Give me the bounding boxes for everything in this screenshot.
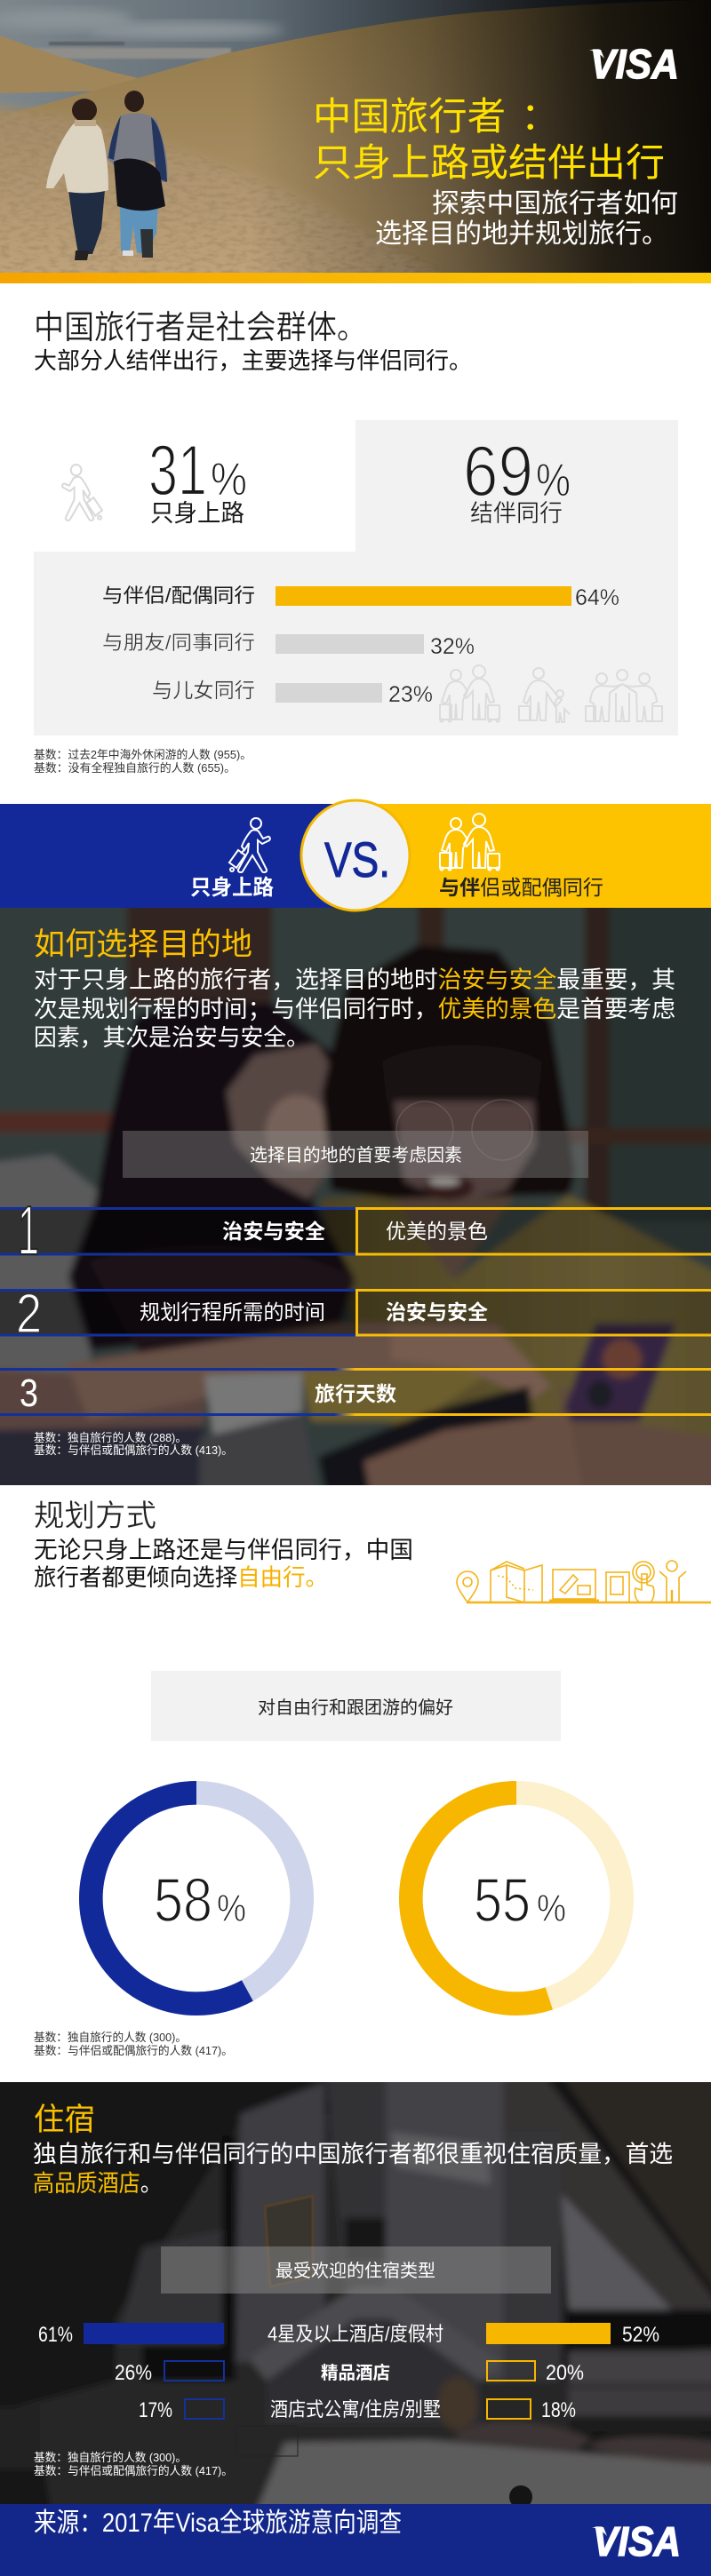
ranking row 1: 优美的景色 [386,1220,488,1243]
heading: 中国旅行者是社会群体。 [34,309,367,346]
visa logo: VISA [593,2518,681,2564]
ranking row 3: 3 [20,1371,38,1415]
donut chart: solo 58%: % [217,1888,246,1930]
donut chart: solo 58% [91,1793,302,2004]
base notes: 基数：独自旅行的人数 (300)。 [34,2451,187,2464]
icon: solo walker white [229,818,270,872]
base notes [34,1431,233,1457]
label: solo: 只身上路 [190,876,274,900]
bar chart: accommodation types: 酒店式公寓/住房/别墅 [270,2398,441,2421]
panel: accommodation [0,2061,711,2523]
paragraph [34,966,675,1051]
bar chart: accommodation types [38,2323,659,2422]
vs circle: VS. [324,831,390,887]
orange band [0,273,711,283]
visa logo: VISA [590,41,679,87]
stat: 69% together: 结伴同行 [470,500,563,527]
panel: how to choose a destination [0,800,711,1510]
icon: group gray [586,670,662,721]
caption box [161,2246,551,2294]
panel: social group intro [34,309,472,374]
hero subtitle: 选择目的地并规划旅行。 [375,219,668,249]
heading: 如何选择目的地 [34,927,252,962]
donut chart: with partner 55%: % [537,1888,566,1930]
bar chart: accommodation types: 精品酒店 [321,2363,390,2383]
panel: planning style [34,1499,711,2057]
background photo: attic bedroom [0,2061,711,2523]
ranking row 3 [0,1368,711,1416]
hero photo: couple walking on dunes [0,0,711,284]
base notes: 基数：与伴侣或配偶旅行的人数 (417)。 [34,2044,233,2057]
ranking row 2: 2 [16,1284,42,1345]
bar chart: accommodation types: 17% [139,2398,172,2422]
bar chart: travel companions: 与朋友/同事同行 [102,632,255,654]
stat: 69% together [463,432,571,527]
stat: 31% alone [148,431,247,527]
bar chart: travel companions: 32% [430,634,475,659]
donut chart: solo 58%: 58 [154,1865,212,1935]
donut chart: with partner 55% [411,1793,622,2004]
label: with partner: 与伴侣或配偶同行 [439,876,603,899]
source line: 来源：2017年Visa全球旅游意向调查 [34,2508,402,2538]
icon: parent and child gray [519,668,570,722]
bar chart: travel companions: 23% [388,682,433,707]
background photo: two women with phones [0,888,711,1510]
base notes: 基数：独自旅行的人数 (288)。 [34,1431,187,1444]
heading: 规划方式 [34,1499,156,1533]
vs circle [301,800,410,910]
paragraph: 因素，其次是治安与安全。 [34,1024,309,1051]
icon strip: travel planning [457,1561,711,1602]
stat: 31% alone: 31 [148,431,207,511]
gold half [356,804,711,908]
paragraph: 次是规划行程的时间；与伴侣同行时，优美的景色是首要考虑 [34,996,675,1022]
bar chart: accommodation types: 26% [115,2361,152,2385]
bar chart: accommodation types: 4星及以上酒店/度假村 [268,2323,443,2345]
stat: 69% together: % [536,455,571,506]
figure: man [107,91,167,258]
paragraph: 高品质酒店。 [33,2170,162,2197]
blue half [0,804,356,908]
panel: solo vs together stats [34,420,678,775]
caption box [123,1131,588,1178]
bar chart: travel companions: 与伴侣/配偶同行 [102,584,255,607]
bar chart: travel companions: 64% [575,585,619,610]
ranking row 1: 1 [18,1191,39,1269]
base notes [34,2451,233,2477]
hero title: 只身上路或结伴出行 [313,142,665,185]
panel: footer [0,2504,711,2576]
icon: solo walker gray [62,465,102,521]
base notes: 基数：没有全程独自旅行的人数 (655)。 [34,761,236,775]
base notes: 基数：独自旅行的人数 (300)。 [34,2031,187,2044]
hero title [313,96,665,185]
panel: hero [0,0,711,284]
figure: woman [46,99,108,260]
ranking row 2: 治安与安全 [386,1300,488,1324]
ranking row 1: 治安与安全 [222,1220,325,1243]
base notes [34,2031,233,2057]
gray stepped background [34,420,678,735]
stat: 31% alone: % [211,454,247,505]
bar chart: travel companions: 与儿女同行 [152,679,255,702]
base notes [34,748,252,775]
ranking row 2: 规划行程所需的时间 [140,1300,325,1324]
ranking row 2 [0,1284,711,1345]
heading: 住宿 [34,2103,95,2137]
ranking row 1 [0,1191,711,1269]
ranking row 3: 旅行天数 [315,1382,396,1405]
hero subtitle [375,189,678,249]
caption box [151,1671,561,1741]
vs band [0,800,711,910]
paragraph [34,1537,413,1591]
hero title: ： [521,96,559,139]
base notes: 基数：与伴侣或配偶旅行的人数 (413)。 [34,1443,233,1457]
paragraph: 旅行者都更倾向选择自由行。 [34,1564,328,1591]
hero title: 中国旅行者 [313,96,506,139]
stat: 31% alone: 只身上路 [150,500,244,527]
stat: 69% together: 69 [463,432,533,512]
donut chart: with partner 55%: 55 [474,1865,531,1935]
caption box: 对自由行和跟团游的偏好 [258,1697,453,1718]
paragraph [33,2141,673,2197]
icon: couple gray [440,665,499,722]
caption box: 选择目的地的首要考虑因素 [250,1145,462,1165]
base notes: 基数：与伴侣或配偶旅行的人数 (417)。 [34,2464,233,2477]
base notes: 基数：过去2年中海外休闲游的人数 (955)。 [34,748,252,761]
hero subtitle: 探索中国旅行者如何 [432,189,678,219]
caption box: 最受欢迎的住宿类型 [276,2261,435,2281]
bar chart: travel companions [102,584,619,707]
paragraph: 独自旅行和与伴侣同行的中国旅行者都很重视住宿质量，首选 [33,2141,673,2167]
paragraph: 无论只身上路还是与伴侣同行，中国 [34,1537,413,1563]
icon: couple white [440,814,499,871]
bar chart: accommodation types: 52% [622,2323,659,2347]
bar chart: accommodation types: 20% [546,2361,584,2385]
paragraph: 对于只身上路的旅行者，选择目的地时治安与安全最重要，其 [34,966,675,993]
bar chart: accommodation types: 61% [38,2323,73,2347]
subheading: 大部分人结伴出行，主要选择与伴侣同行。 [34,347,472,374]
bar chart: accommodation types: 18% [541,2398,576,2422]
